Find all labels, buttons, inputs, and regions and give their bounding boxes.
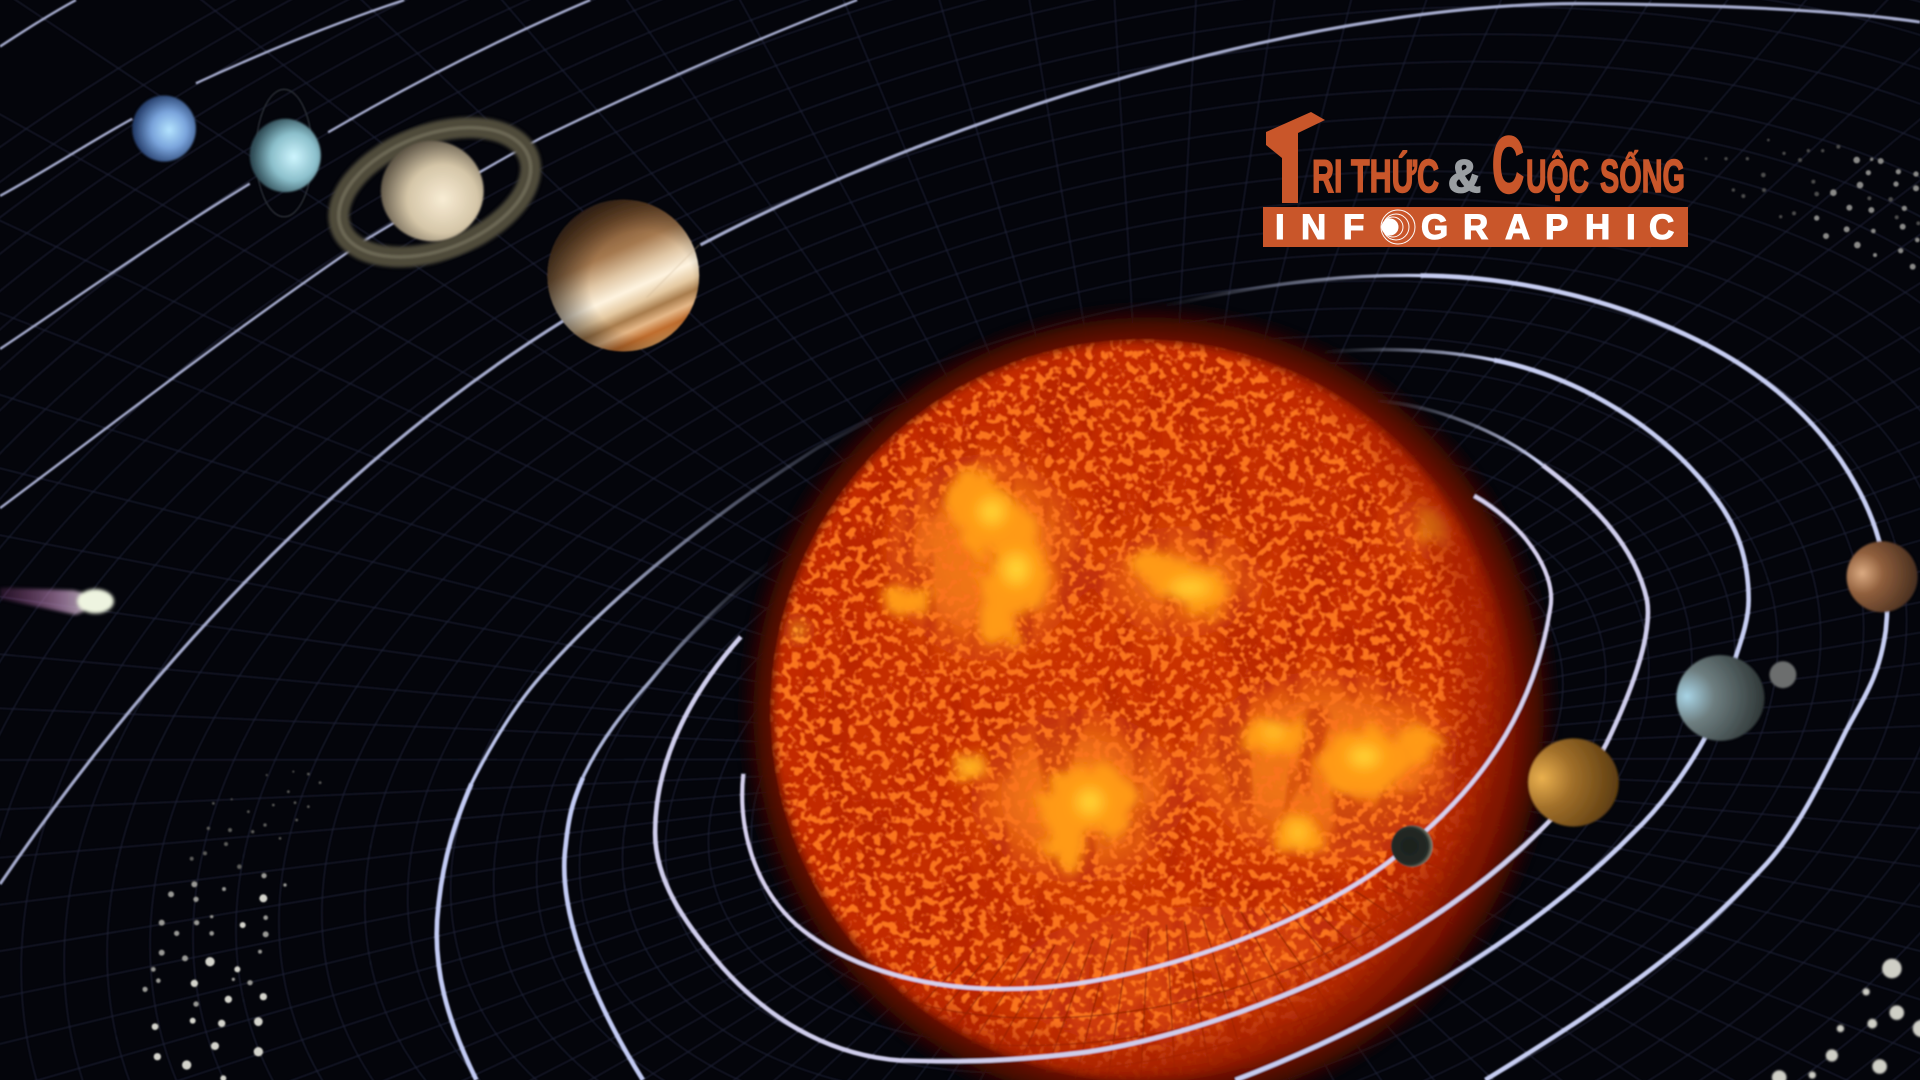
Earth orbit [564, 350, 1749, 1080]
logo wordmark [1312, 120, 1685, 209]
planet: Mars [1847, 541, 1918, 612]
infographic banner [1263, 207, 1688, 247]
planet: Neptune [132, 96, 196, 162]
lower limb glow [1004, 906, 1420, 1053]
planet: Jupiter [546, 199, 700, 352]
Mercury orbit [742, 496, 1551, 989]
logo wordmark: RI THỨC [1312, 150, 1439, 202]
bright solar regions [877, 469, 1456, 862]
logo: Tri Thức & Cuộc Sống Infographic [1263, 112, 1688, 247]
sun limb shading [769, 338, 1513, 1080]
planet: Saturn [320, 103, 549, 282]
banner icon: orbit circle [1381, 210, 1415, 244]
planet: Mercury [1391, 825, 1433, 867]
logo mark: stylised T [1266, 112, 1325, 203]
sun [769, 338, 1502, 1080]
broad orange glow regions [900, 467, 1457, 869]
banner text [1275, 208, 1674, 247]
grid overlay on sun [892, 826, 1502, 1070]
comet [0, 588, 114, 615]
logo wordmark: & [1448, 150, 1481, 202]
logo wordmark: C [1492, 120, 1524, 209]
Moon [1769, 661, 1796, 688]
planet: Earth [1676, 655, 1764, 741]
inner planet orbits [437, 275, 1887, 1080]
logo wordmark: SỐNG [1600, 150, 1685, 202]
sun granulation [770, 339, 1512, 1080]
banner text: GRAPHIC [1421, 208, 1674, 247]
Venus orbit [655, 400, 1648, 1061]
asteroid belt: upper right [1705, 139, 1920, 270]
logo wordmark: UỘC [1526, 150, 1589, 202]
planet: Uranus [250, 89, 321, 217]
Mars orbit [437, 275, 1887, 1080]
planet: Venus [1528, 738, 1619, 827]
sun dark filaments [770, 339, 1512, 1080]
asteroid belt: lower right [1772, 959, 1920, 1080]
banner text: INF [1275, 208, 1364, 247]
sun halo [735, 299, 1562, 1080]
asteroid belt: lower left [142, 771, 321, 1080]
